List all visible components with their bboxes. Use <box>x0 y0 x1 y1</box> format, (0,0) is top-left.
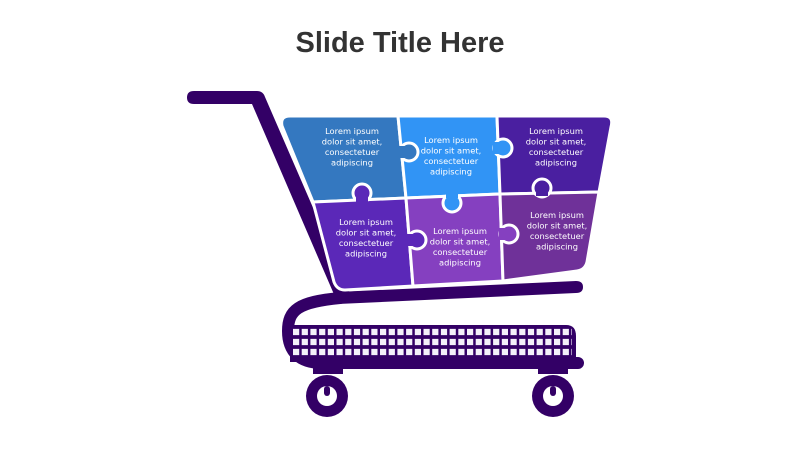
text TR: Lorem ipsum <box>529 126 583 136</box>
title: Slide Title Here <box>296 27 504 59</box>
text BM: adipiscing <box>439 258 481 268</box>
text BL: dolor sit amet, <box>336 228 396 238</box>
text TL: consectetuer <box>325 147 380 157</box>
piece BM <box>406 194 503 286</box>
piece TR <box>497 116 612 194</box>
text BM: Lorem ipsum <box>433 226 487 236</box>
text TL: dolor sit amet, <box>322 136 382 146</box>
text TR: consectetuer <box>529 147 584 157</box>
text blocks <box>322 126 587 268</box>
text BM: dolor sit amet, <box>430 236 490 246</box>
text TM: dolor sit amet, <box>421 146 481 156</box>
text TR: dolor sit amet, <box>526 136 586 146</box>
handle <box>187 91 350 299</box>
piece TM <box>398 116 500 198</box>
text BR: consectetuer <box>530 231 585 241</box>
piece TL <box>282 116 406 202</box>
puzzle <box>282 116 612 290</box>
piece BL <box>313 198 413 290</box>
text BR: dolor sit amet, <box>527 220 587 230</box>
basket grid <box>290 325 576 362</box>
text BL: Lorem ipsum <box>339 217 393 227</box>
text TR: adipiscing <box>535 158 577 168</box>
text BR: adipiscing <box>536 242 578 252</box>
piece BR <box>500 192 599 281</box>
text TM: adipiscing <box>430 166 472 176</box>
text BL: consectetuer <box>339 238 394 248</box>
text TL: adipiscing <box>331 158 373 168</box>
cart frame <box>187 91 583 417</box>
knobs <box>353 184 371 202</box>
grid lines <box>293 332 572 352</box>
wheels <box>306 366 574 417</box>
text BM: consectetuer <box>433 247 488 257</box>
top rail <box>336 281 583 304</box>
text BL: adipiscing <box>345 248 387 258</box>
text TL: Lorem ipsum <box>325 126 379 136</box>
text TM: consectetuer <box>424 156 479 166</box>
text TM: Lorem ipsum <box>424 135 478 145</box>
loop to bottom <box>288 298 578 363</box>
text BR: Lorem ipsum <box>530 210 584 220</box>
